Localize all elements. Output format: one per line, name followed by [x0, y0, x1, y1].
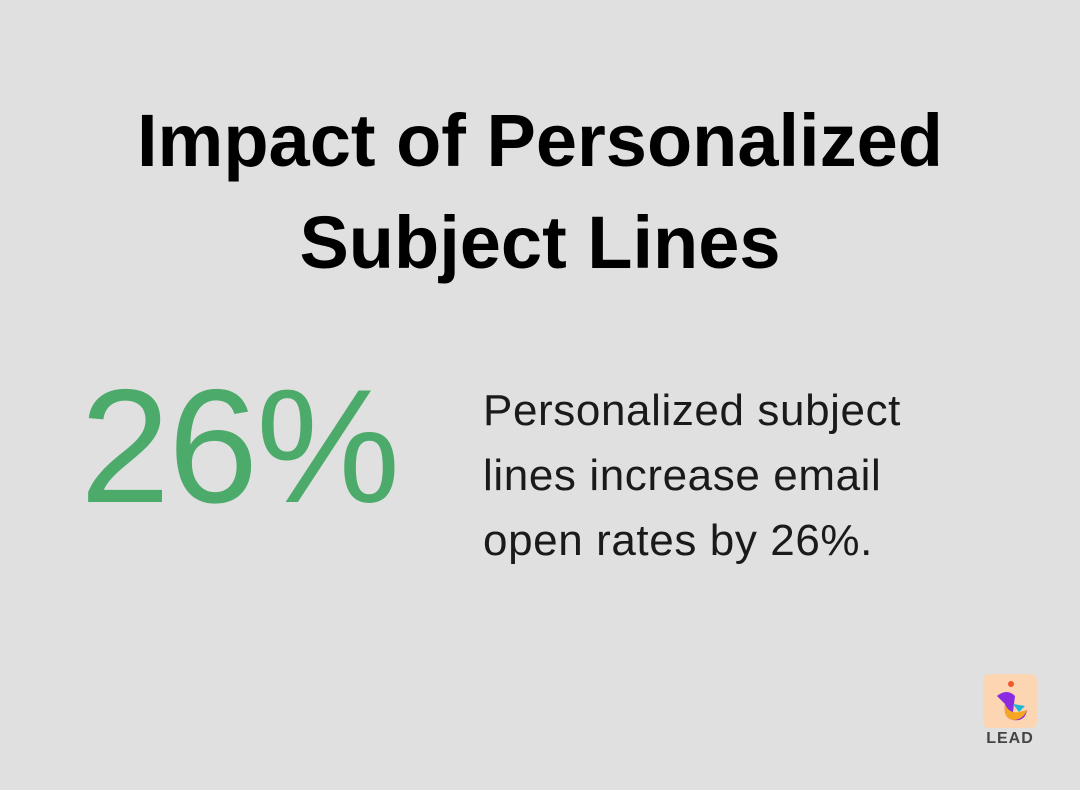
title [137, 99, 943, 284]
title: Subject Lines [299, 201, 781, 284]
title: Impact of Personalized [137, 99, 943, 182]
icon: logo [983, 674, 1037, 728]
description: Personalized subject lines increase email open rates by 26%. [483, 386, 901, 565]
big stat: 26% [80, 356, 398, 537]
logo text: LEAD [986, 730, 1034, 747]
